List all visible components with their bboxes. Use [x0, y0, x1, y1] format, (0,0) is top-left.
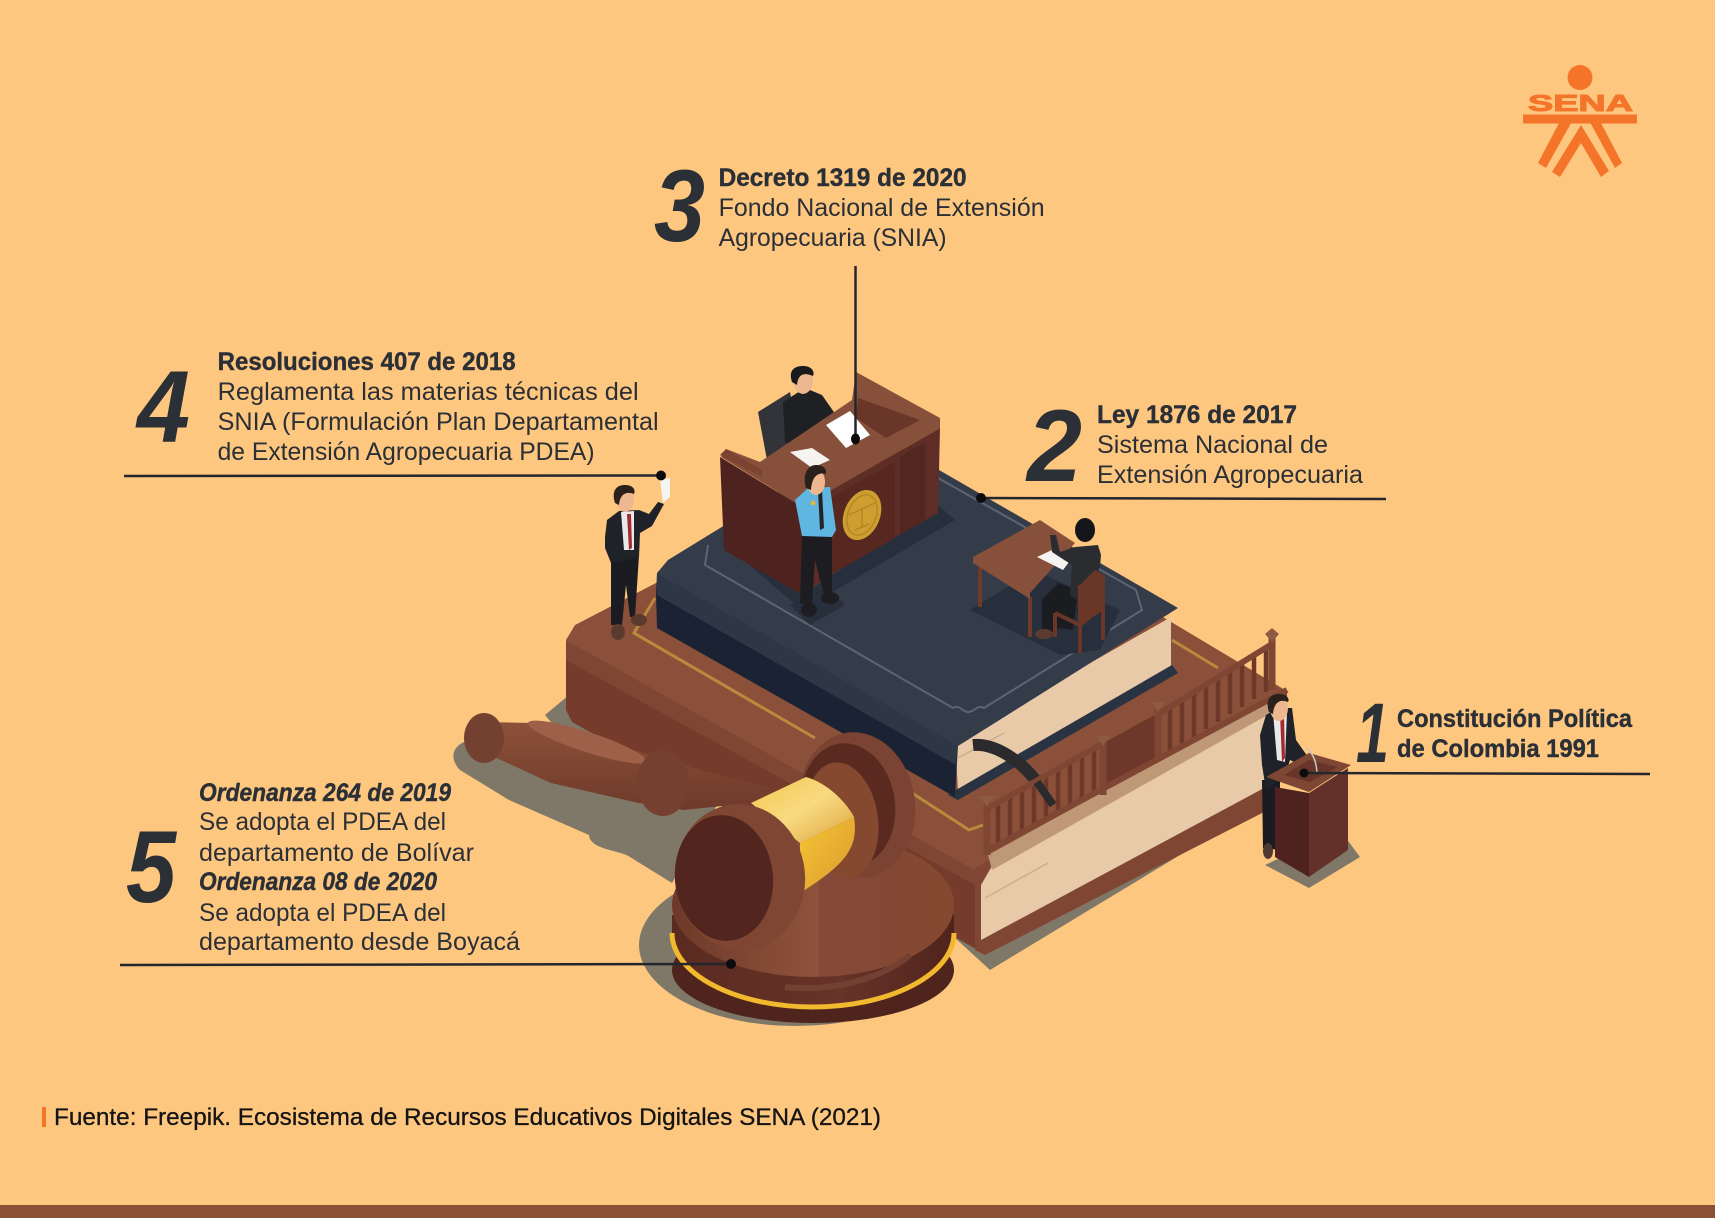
- right cover: [975, 690, 1287, 955]
- inset border: [705, 478, 1142, 712]
- robe: [783, 388, 850, 458]
- callout 4: Resoluciones: [135, 348, 659, 466]
- illustration: court on law book and gavel: [453, 366, 1360, 1026]
- callout 3 leader line: [851, 266, 860, 444]
- papers: [826, 411, 870, 448]
- lectern: [1275, 787, 1309, 877]
- microphone: [1306, 748, 1317, 772]
- shirt: [795, 487, 836, 537]
- callout 1: Constitución: Constitución Política: [1397, 705, 1633, 733]
- logo: SENA: [1523, 65, 1637, 177]
- back rail inner: [856, 398, 920, 438]
- head: [807, 469, 825, 495]
- callout 3: Decreto: [654, 149, 1045, 263]
- head: [616, 486, 634, 512]
- front rim: [668, 798, 812, 956]
- ribbon: [973, 745, 1037, 782]
- gavel: [464, 713, 954, 1023]
- hand: [843, 415, 853, 425]
- wooden railing: [979, 628, 1287, 855]
- callout 1: Constitución: de Colombia 1991: [1397, 735, 1599, 763]
- gold line: [634, 598, 1218, 830]
- shoe: [1035, 629, 1053, 639]
- jacket: [1260, 708, 1308, 790]
- callout 4: Resoluciones: 4: [135, 350, 190, 464]
- speaker at lectern: [1260, 694, 1351, 877]
- callout 5: Ordenanzas: Ordenanza 08 de 2020: [199, 868, 437, 896]
- callout 4 leader line: [124, 470, 666, 480]
- callout 4: Resoluciones: de Extensión Agropecuaria PDEA): [218, 438, 595, 466]
- rails: [985, 644, 1287, 852]
- handle: [484, 722, 770, 810]
- guard: [795, 465, 839, 617]
- base: [672, 833, 954, 1023]
- badge: [810, 500, 816, 506]
- bottom bar: [0, 1205, 1715, 1218]
- jacket: [605, 502, 664, 563]
- head: [1270, 695, 1288, 721]
- seated man and table: [973, 518, 1104, 653]
- callout 4: Resoluciones: SNIA (Formulación Plan Departamental: [218, 408, 659, 436]
- shadows on the ground: [453, 690, 1360, 1026]
- callout 1: Constitución: 1: [1356, 686, 1389, 780]
- right face: [802, 428, 940, 595]
- callout 5: Ordenanzas: departamento de Bolívar: [199, 839, 474, 867]
- left face: [566, 648, 978, 950]
- table legs: [980, 530, 1040, 637]
- callout 2 leader line: [976, 493, 1386, 503]
- source note: Fuente: Freepik. Ecosistema de Recursos Educativos Digitales SENA (2021): [54, 1104, 881, 1131]
- callout 4: Resoluciones: Reglamenta las materias técnicas del: [218, 378, 639, 406]
- callout 3: Decreto: Agropecuaria (SNIA): [719, 224, 947, 252]
- callout 5: Ordenanzas: Se adopta el PDEA del: [199, 808, 446, 836]
- callout 2: Ley: Extensión Agropecuaria: [1097, 461, 1363, 489]
- cover top: [657, 433, 1178, 746]
- gold seal: [836, 484, 888, 546]
- tie: [818, 490, 824, 530]
- callout 5: Ordenanzas: Se adopta el PDEA del: [199, 899, 446, 927]
- lower cover: [948, 665, 1178, 800]
- head: [1075, 518, 1095, 542]
- callout 3: Decreto: 3: [654, 149, 705, 263]
- legs: [1262, 780, 1280, 850]
- trousers: [1042, 583, 1078, 636]
- shirt and tie: [621, 511, 634, 550]
- base book: [566, 460, 1287, 955]
- callout 2: Ley: Sistema Nacional de: [1097, 431, 1328, 459]
- callout 3: Decreto: Fondo Nacional de Extensión: [719, 194, 1045, 222]
- callout 3: Decreto: Decreto 1319 de 2020: [719, 164, 967, 192]
- callout 2: Ley: [1025, 389, 1363, 503]
- balusters: [998, 649, 1266, 847]
- shoe: [1263, 843, 1273, 859]
- post finials: [979, 628, 1279, 806]
- callout 1: Constitución: [1356, 686, 1633, 780]
- dark book: [656, 433, 1178, 800]
- callout 5 leader line: [120, 959, 736, 969]
- pages: [955, 617, 1171, 790]
- jacket: [1050, 535, 1101, 603]
- pages: [981, 703, 1278, 940]
- callout 5: Ordenanzas: departamento desde Boyacá: [199, 928, 520, 956]
- callout 4: Resoluciones: Resoluciones 407 de 2018: [218, 348, 516, 376]
- legs: [800, 530, 832, 605]
- left face: [720, 457, 802, 595]
- far flange: [789, 725, 925, 885]
- table shadow: [970, 570, 1120, 655]
- judge bench: [720, 372, 940, 595]
- callout 5: Ordenanzas: [126, 779, 520, 956]
- shoes: [611, 624, 625, 640]
- shoes: [801, 603, 817, 617]
- man with paper: [605, 478, 670, 640]
- paper: [660, 478, 670, 503]
- callout 2: Ley: 2: [1025, 389, 1082, 503]
- shirt and tie: [1273, 712, 1287, 762]
- top face: [566, 460, 1285, 872]
- desk top: [721, 372, 940, 507]
- judge: [758, 366, 853, 460]
- front face: [669, 810, 779, 946]
- table top: [973, 520, 1075, 599]
- posts: [987, 635, 1272, 855]
- ribbon end: [1037, 782, 1053, 805]
- head cylinder: [798, 758, 886, 882]
- bench shadow: [720, 505, 955, 610]
- callout 5: Ordenanzas: 5: [126, 810, 177, 924]
- callout 5: Ordenanzas: Ordenanza 264 de 2019: [199, 779, 451, 807]
- callout 2: Ley: Ley 1876 de 2017: [1097, 401, 1297, 429]
- spine: [656, 573, 958, 797]
- paper: [1037, 550, 1069, 570]
- gold band: [751, 777, 854, 843]
- chair: [758, 392, 800, 460]
- callout 1 leader line: [1300, 768, 1650, 778]
- logo: SENA: SENA: [1528, 90, 1633, 116]
- head: [793, 366, 813, 394]
- panel: [1100, 712, 1160, 792]
- legs: [611, 555, 639, 625]
- left side rail: [720, 449, 762, 477]
- chair: [1055, 570, 1104, 653]
